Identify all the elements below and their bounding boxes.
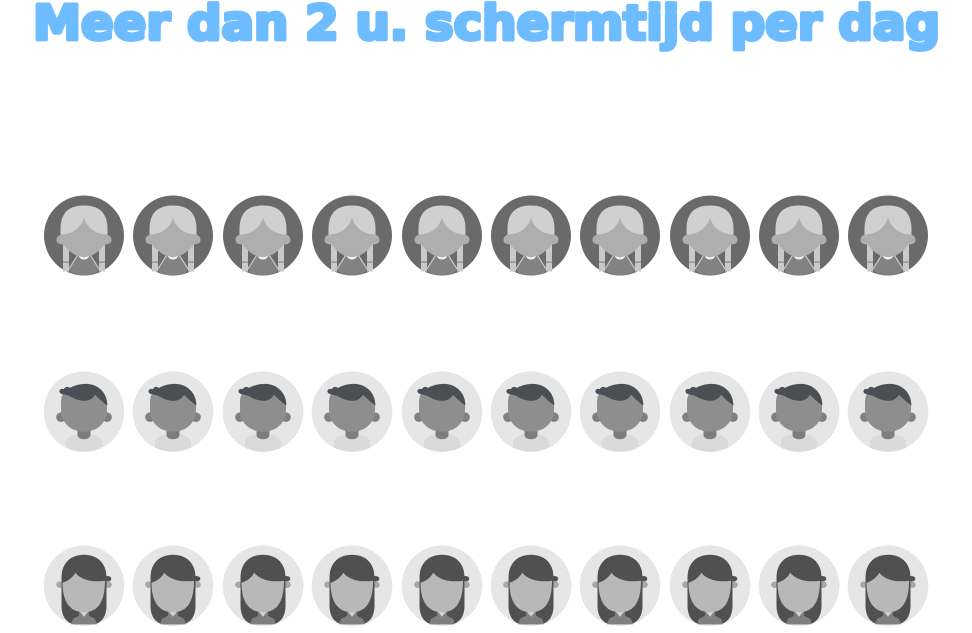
icon: boy 2	[133, 372, 213, 452]
icon: girl with braids 1	[44, 196, 124, 276]
row 1: girls with braids	[44, 196, 928, 276]
icon: boy 10	[848, 372, 928, 452]
icon: girl with long hair 4	[312, 546, 392, 626]
icon: boy 7	[580, 372, 660, 452]
icon: girl with braids 5	[402, 196, 482, 276]
icon: girl with braids 4	[312, 196, 392, 276]
icon: girl with long hair 3	[223, 546, 303, 626]
icon: girl with braids 9	[759, 196, 839, 276]
icon: girl with long hair 8	[670, 546, 750, 626]
icon: girl with long hair 2	[133, 546, 213, 626]
icon: boy 9	[759, 372, 839, 452]
icon: boy 8	[670, 372, 750, 452]
icon: girl with braids 8	[670, 196, 750, 276]
row 3: girls with long hair	[44, 546, 928, 626]
icon: boy 3	[223, 372, 303, 452]
icon: girl with braids 10	[848, 196, 928, 276]
icon: boy 5	[402, 372, 482, 452]
icon: girl with braids 6	[491, 196, 571, 276]
icon: girl with long hair 10	[848, 546, 928, 626]
icon: girl with long hair 5	[402, 546, 482, 626]
icon: boy 1	[44, 372, 124, 452]
icon: girl with braids 3	[223, 196, 303, 276]
icon: girl with braids 2	[133, 196, 213, 276]
icon: girl with long hair 9	[759, 546, 839, 626]
icon: girl with long hair 1	[44, 546, 124, 626]
row 2: boys	[44, 372, 928, 452]
icon: girl with long hair 6	[491, 546, 571, 626]
icon: girl with braids 7	[580, 196, 660, 276]
icon: boy 4	[312, 372, 392, 452]
icon: boy 6	[491, 372, 571, 452]
icon: girl with long hair 7	[580, 546, 660, 626]
